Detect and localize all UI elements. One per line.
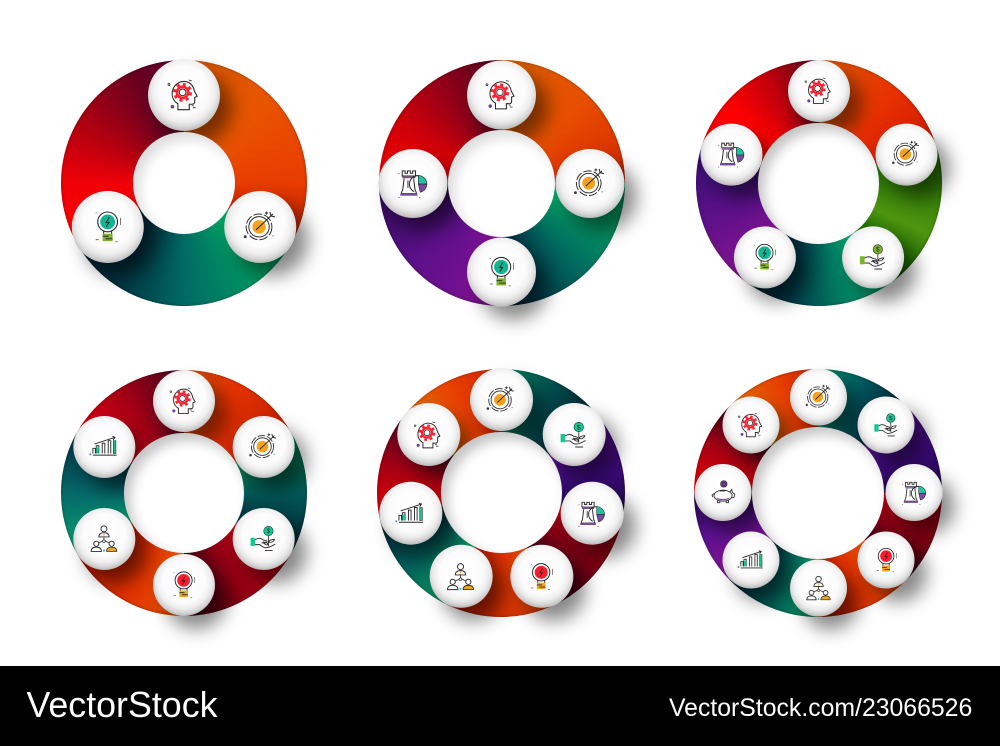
centre hole [752,426,884,558]
centre hole [448,130,555,236]
centre hole [124,433,244,553]
ring: six coloured segments [60,370,306,616]
ball: hand with coin plant icon [857,396,914,453]
ball: rising bar chart icon [73,416,135,478]
ball: rising bar chart icon [722,532,779,589]
ball: hand with coin plant icon [232,508,294,570]
ball: light bulb icon [857,532,914,589]
ball: chess rook with pie chart icon [885,464,942,521]
brand logo text: VectorStock [26,685,218,725]
ball: target icon [232,416,294,478]
ball: rising bar chart icon [379,482,442,545]
ball: team hierarchy icon [429,545,492,608]
ball: light bulb icon [467,237,536,306]
ball: light bulb icon [510,545,573,608]
ball: target icon [470,368,532,431]
ring: seven coloured segments [377,368,625,616]
ball: light bulb icon [71,191,143,263]
footer banner [0,666,1000,746]
donut chart: four segments [378,60,648,332]
ball: piggy bank icon [694,464,751,521]
ball: hand with coin plant icon [542,403,605,466]
ball shadows [72,60,320,288]
donut chart: five segments [696,60,961,313]
ball: target icon [224,191,296,263]
ball: target icon [556,148,624,218]
ball shadows [380,370,648,632]
centre hole [440,432,562,553]
donut chart: seven segments [377,368,648,632]
ball: hand with coin plant icon [842,226,904,288]
ball: light bulb icon [152,554,214,616]
centre hole [758,122,879,244]
donut chart: six segments [61,370,318,640]
ball: target icon [790,368,847,426]
ball: light bulb icon [734,226,796,288]
ring: orange, green and red segments [60,60,306,306]
ball: team hierarchy icon [73,508,135,570]
centre hole [132,132,234,234]
ring: orange, teal, purple and red segments [378,60,624,306]
ring: orange, green, teal, purple and red segments [696,60,942,306]
donut chart: three segments [61,59,320,306]
ball: target icon [875,124,937,186]
ball: head with gear icon [152,370,214,432]
ball: team hierarchy icon [790,560,847,616]
ball: head with gear icon [722,396,779,453]
ball: chess rook with pie chart icon [700,124,762,186]
ball: head with gear icon [788,60,850,122]
ring: eight coloured segments [694,368,942,616]
image reference URL: VectorStock.com/23066526 [669,695,972,722]
ball shadows [74,372,318,640]
donut chart: eight segments [694,368,966,641]
ball shadows [700,374,966,641]
ball shadows [378,62,648,332]
ball: head with gear icon [467,60,536,129]
ball: chess rook with pie chart icon [560,482,623,545]
ball: chess rook with pie chart icon [378,148,448,218]
ball shadows [704,62,961,313]
ball: head with gear icon [397,403,460,466]
ball: head with gear icon [148,59,220,131]
